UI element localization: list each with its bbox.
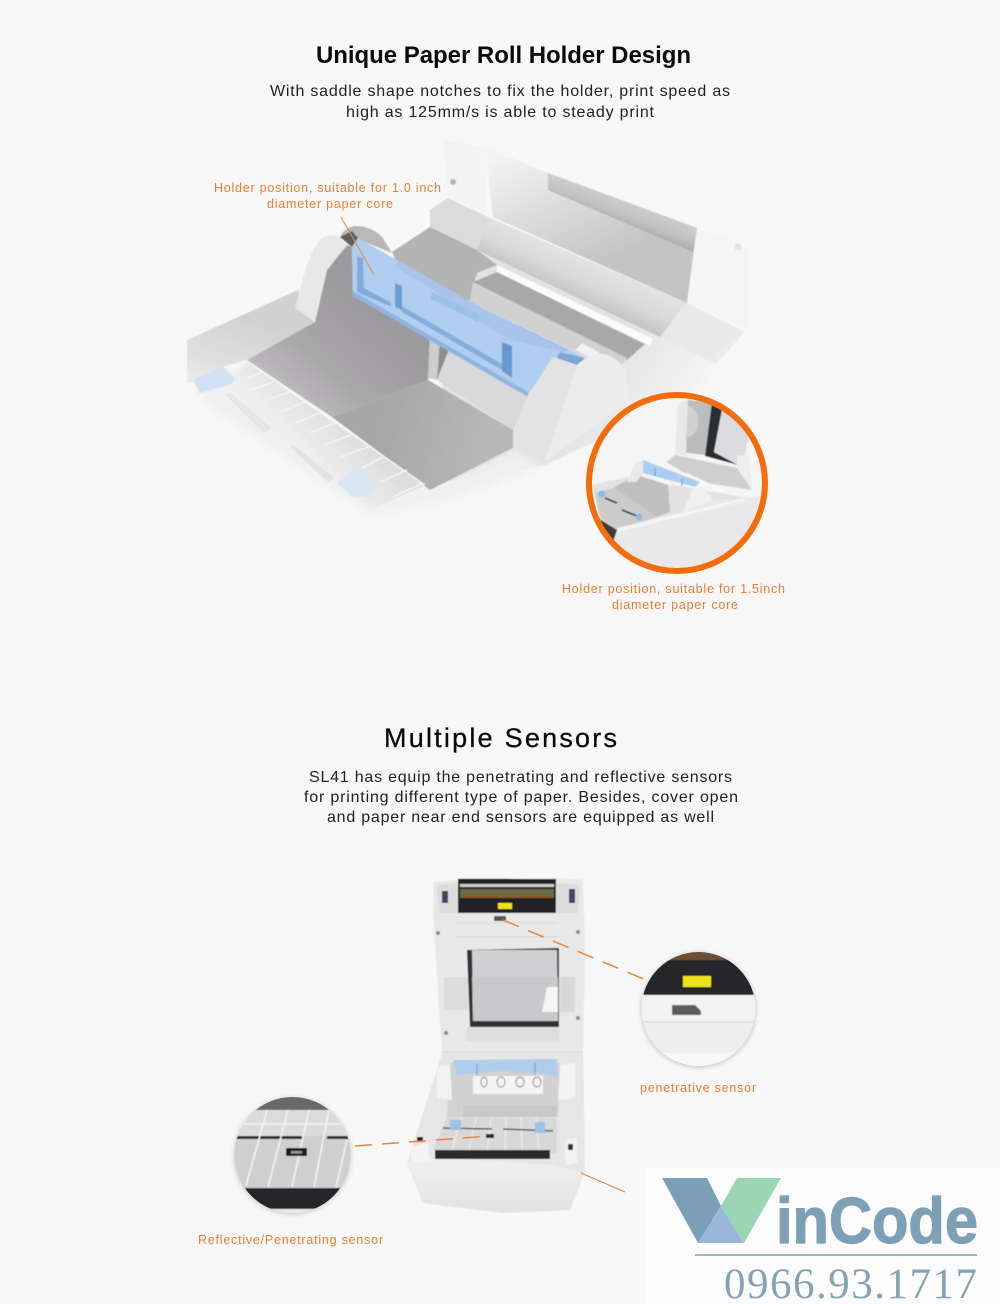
saddles (437, 1065, 452, 1100)
section description: paper roll holder (270, 83, 730, 121)
printer lid centre (485, 147, 697, 303)
warning sticker (498, 903, 512, 909)
lid lower band (467, 1027, 559, 1041)
callout label: 1.0 inch holder: Holder position, suitable for 1.0 inch (214, 181, 441, 195)
left deck (187, 290, 315, 383)
inset front body (614, 496, 760, 568)
section heading: paper roll holder: Unique Paper Roll Holder Design (316, 42, 691, 69)
section description: multiple sensors: and paper near end sensors are equipped as well (327, 809, 714, 826)
well left wall (247, 245, 430, 417)
platen roller (435, 1150, 550, 1159)
lid bolts (436, 930, 580, 1035)
tray slots (225, 392, 272, 433)
front cover (407, 1158, 580, 1213)
section description: paper roll holder: With saddle shape notches to fix the holder, print speed as (270, 83, 730, 100)
watermark logo: WinCode (645, 1168, 1000, 1304)
inset tray (595, 488, 657, 530)
print head (458, 879, 556, 913)
ribbed paper tray (193, 362, 425, 510)
callout label: 1.0 inch holder (214, 181, 441, 211)
lid right panel (687, 228, 750, 330)
section heading: multiple sensors: Multiple Sensors (384, 723, 617, 753)
logo wordmark: inCode (776, 1184, 978, 1257)
well floor (332, 380, 513, 490)
white paper slot (497, 265, 653, 346)
label: penetrative sensor: penetrative sensor (640, 1081, 756, 1095)
lid sensor (494, 916, 506, 921)
instruction sticker (473, 1076, 543, 1094)
logo mark (662, 1178, 781, 1243)
lid hinges (436, 883, 458, 913)
blue holder (453, 1059, 557, 1077)
open printer illustration, top view (407, 878, 585, 1213)
hinge roller (430, 198, 745, 364)
left saddle rear arc (340, 226, 392, 253)
right saddle (513, 343, 630, 462)
lid window (548, 173, 697, 252)
inset white slot (686, 473, 708, 484)
inset deck (592, 477, 746, 520)
lid left panel (443, 140, 487, 213)
rear channel (473, 272, 645, 360)
section description: paper roll holder: high as 125mm/s is able to steady print (346, 104, 655, 121)
blue guide tabs (193, 367, 235, 393)
thin leader: front cover (581, 1173, 625, 1192)
section description: multiple sensors: for printing different type of paper. Besides, cover open (304, 789, 738, 806)
callout label: 1.5 inch holder (562, 582, 785, 612)
lid crossbar (455, 913, 560, 945)
paper window (467, 948, 559, 1027)
lower body (407, 1052, 585, 1213)
section description: multiple sensors: SL41 has equip the penetrating and reflective sensors (309, 769, 732, 786)
section description: multiple sensors (304, 769, 738, 826)
inset blue holder (643, 460, 700, 487)
well inner right panel (428, 333, 527, 430)
dashed leader: penetrative sensor (503, 920, 646, 980)
callout leader: 1.0 inch holder (341, 217, 374, 275)
dashed leader: reflective sensor (355, 1136, 490, 1146)
inset saddles (627, 460, 643, 482)
side switches (410, 1143, 430, 1162)
lower front body (192, 362, 545, 515)
inset well (613, 475, 670, 517)
paper tray (433, 1117, 557, 1153)
inset roller and rear deck (666, 455, 752, 490)
callout label: 1.0 inch holder: diameter paper core (267, 197, 393, 211)
label: reflective sensor: Reflective/Penetrating sensor (198, 1233, 383, 1247)
right deck (430, 225, 717, 482)
inner well (447, 1063, 560, 1117)
blue paper holder (352, 238, 585, 397)
inset circle: 1.5 inch holder position (580, 390, 770, 580)
callout label: 1.5 inch holder: Holder position, suitable for 1.5inch (562, 582, 785, 596)
detail circle: reflective sensor (230, 1095, 357, 1220)
callout label: 1.5 inch holder: diameter paper core (612, 598, 738, 612)
main illustration: printer interior with blue holder (175, 125, 810, 560)
side brackets (444, 977, 468, 1010)
detail circle: penetrative sensor (635, 950, 765, 1070)
soft fade of lid and deck edges (490, 125, 810, 195)
inset lid (686, 400, 712, 456)
block behind holder (392, 227, 497, 300)
upper lid (433, 878, 585, 1053)
left saddle (295, 235, 347, 322)
